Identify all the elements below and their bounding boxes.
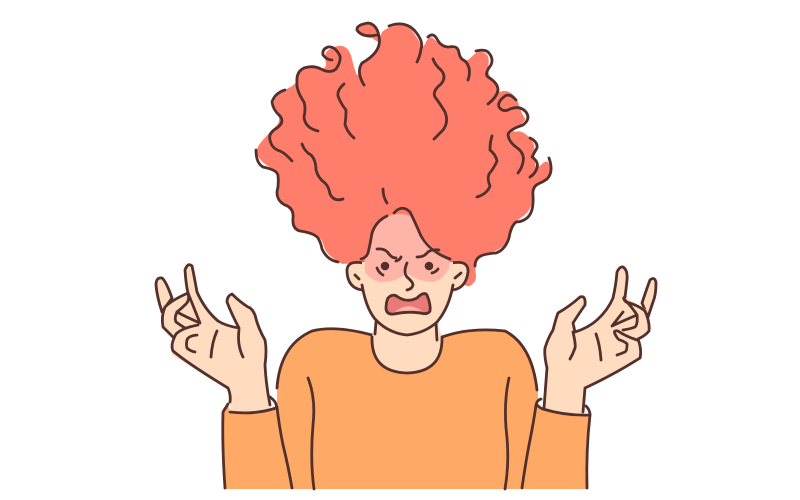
neck bbox=[372, 318, 442, 373]
hair bbox=[256, 23, 551, 286]
hairline bbox=[361, 216, 387, 259]
nose bbox=[405, 263, 413, 290]
eyes bbox=[381, 262, 389, 270]
eyebrows bbox=[377, 249, 396, 258]
right hand bbox=[544, 267, 656, 414]
left sleeve bbox=[223, 397, 292, 489]
hair curl fill bbox=[357, 23, 380, 42]
left hand bbox=[156, 264, 271, 414]
face bbox=[361, 208, 453, 335]
forehead and flushed cheeks bbox=[365, 214, 450, 282]
mouth bbox=[386, 294, 430, 314]
ears bbox=[347, 262, 468, 290]
sweater body bbox=[277, 329, 538, 489]
right sleeve bbox=[522, 399, 590, 489]
